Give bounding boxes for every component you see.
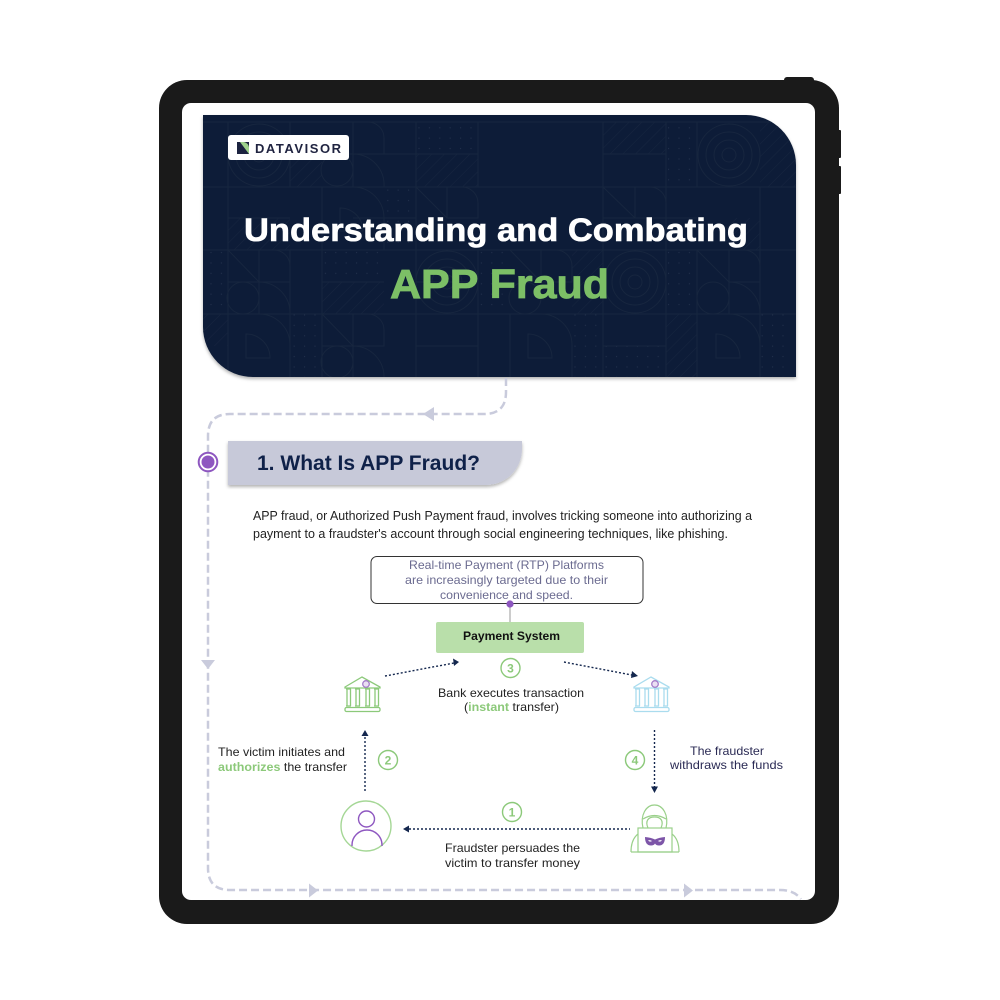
step 3 text — [438, 686, 584, 714]
arrow: bank to fraudster — [651, 730, 658, 793]
callout: RTP platforms — [371, 556, 643, 604]
step 1 text — [445, 841, 580, 870]
intro paragraph: APP fraud, or Authorized Push Payment fraud, involves tricking someone into authorizing a — [253, 509, 752, 523]
step 4 text: withdraws the funds — [669, 758, 783, 772]
step 1 text: Fraudster persuades the — [445, 841, 580, 855]
step 2 badge — [378, 750, 398, 770]
step 2 text — [218, 745, 347, 774]
step 4 text — [669, 744, 783, 772]
title: Understanding and Combating — [244, 212, 748, 248]
payment system box: Payment System — [463, 629, 560, 643]
title: APP Fraud — [390, 261, 609, 307]
icon: victim bank — [345, 677, 380, 712]
step 3 badge — [501, 658, 520, 678]
connector — [506, 600, 514, 622]
step 3 badge: 3 — [507, 662, 514, 676]
step 1 badge: 1 — [509, 806, 516, 820]
step 2 text: authorizes the transfer — [218, 760, 347, 774]
intro paragraph — [253, 509, 752, 541]
callout: RTP platforms: convenience and speed. — [440, 588, 573, 602]
timeline bullet — [199, 453, 217, 471]
header banner — [203, 115, 796, 378]
arrow: fraudster to victim — [403, 826, 630, 832]
tablet frame — [159, 77, 841, 924]
step 2 badge: 2 — [385, 754, 392, 768]
step 4 badge: 4 — [632, 754, 639, 768]
section heading: 1. What Is APP Fraud? — [257, 452, 480, 475]
callout: RTP platforms: Real-time Payment (RTP) Platforms — [409, 558, 604, 572]
payment system box — [436, 622, 584, 653]
title — [244, 212, 748, 307]
step 4 badge — [626, 750, 644, 770]
step 3 text: (instant transfer) — [464, 700, 559, 714]
icon: fraudster bank — [634, 677, 669, 712]
step 4 text: The fraudster — [690, 744, 764, 758]
step 1 badge — [502, 802, 522, 822]
icon: fraudster — [631, 805, 679, 852]
arrow: bank to payment system — [385, 658, 459, 676]
logo: DataVisor: DATAVISOR — [255, 141, 342, 156]
section heading — [228, 441, 522, 485]
icon: victim — [341, 801, 391, 851]
step 2 text: The victim initiates and — [218, 745, 345, 759]
logo: DataVisor — [228, 135, 349, 160]
step 3 text: Bank executes transaction — [438, 686, 584, 700]
callout: RTP platforms: are increasingly targeted due to their — [405, 573, 608, 587]
dashed flow path — [201, 378, 801, 899]
intro paragraph: payment to a fraudster's account through social engineering techniques, like phishing. — [253, 527, 728, 541]
step 1 text: victim to transfer money — [445, 856, 580, 870]
arrow: victim to bank — [362, 730, 368, 791]
arrow: payment system to bank — [564, 662, 638, 678]
